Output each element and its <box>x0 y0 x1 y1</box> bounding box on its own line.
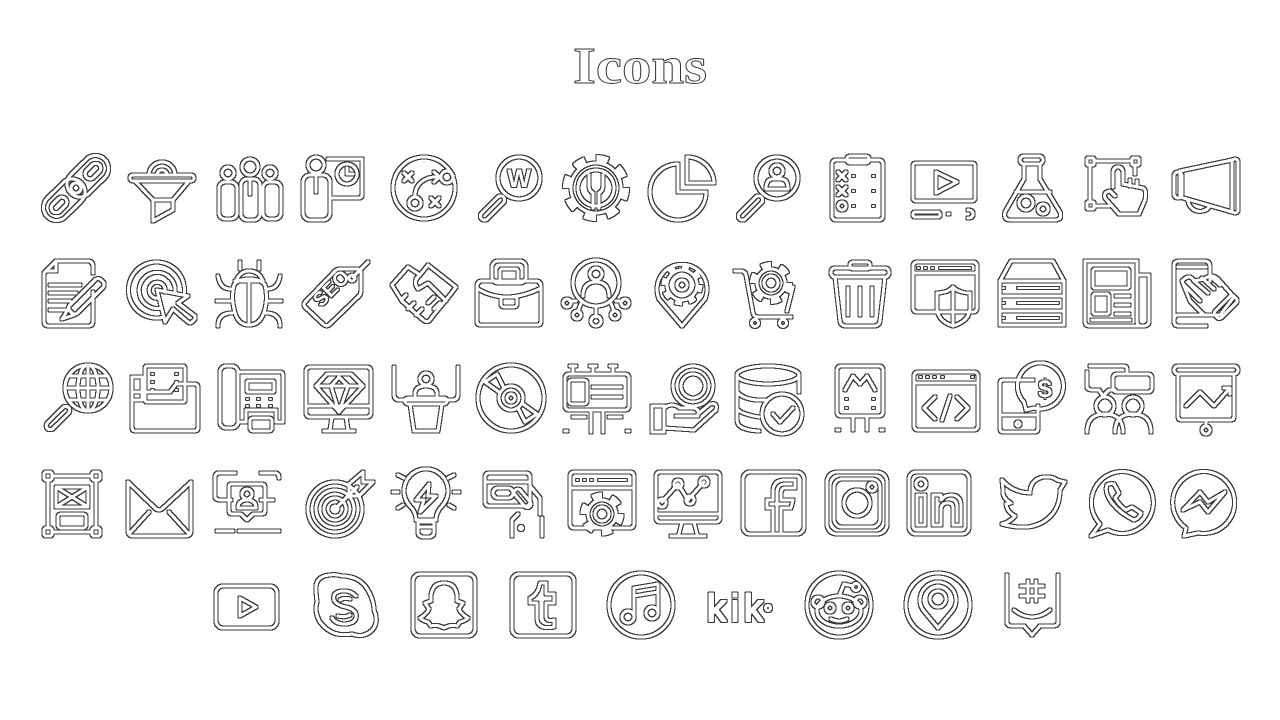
icon: gear with wrench <box>567 159 625 217</box>
icon: megaphone <box>1174 159 1238 213</box>
icon: card and hand <box>485 473 542 536</box>
icon: compact disc <box>478 365 544 431</box>
icon: cart with gear <box>735 265 793 326</box>
icon: hand on selection frame <box>1087 158 1146 214</box>
icon: WhatsApp <box>1091 472 1153 536</box>
icon: folder with film <box>132 366 198 431</box>
icon: Reddit <box>807 573 871 637</box>
icon: SEO price tag: SEO <box>309 266 354 312</box>
icon: team of people <box>219 159 281 220</box>
icon: video player <box>913 163 975 218</box>
icon: phone and pointing hand <box>1174 261 1238 326</box>
icon: globe search <box>45 365 111 431</box>
icon: Tumblr <box>512 574 574 636</box>
icon: mobile payment: $ <box>1038 375 1052 403</box>
icon: envelope <box>128 482 191 536</box>
icon: YouTube <box>216 586 277 628</box>
icon: presenter with chart <box>303 157 362 220</box>
icon: user notification <box>215 473 279 531</box>
icon: Skype <box>316 575 376 636</box>
icon: monitor with line chart <box>656 472 720 536</box>
icon: Facebook <box>743 472 804 534</box>
icon: crop frame <box>44 472 100 536</box>
icon: presentation chart <box>1174 366 1238 434</box>
icon: database with check <box>737 366 802 434</box>
icon: chain link <box>38 150 114 226</box>
icon: Instagram <box>827 472 887 534</box>
icon: magnifier with W <box>479 157 540 222</box>
icon: target with arrow <box>308 472 373 536</box>
icon: handshake <box>392 265 456 322</box>
icon: LinkedIn <box>909 472 969 534</box>
icon: target and cursor <box>128 262 195 323</box>
icon: user network <box>563 260 629 326</box>
icon: pie chart <box>650 157 714 220</box>
icon: browser and shield <box>913 262 977 326</box>
icon: magnifier with user <box>737 157 798 222</box>
icon: location pin with gear <box>657 264 707 326</box>
icon: billboard <box>565 366 629 432</box>
icon: map sign <box>837 366 883 430</box>
icon: people in discussion <box>1087 366 1152 432</box>
title: Icons <box>573 38 707 95</box>
icon: computer bug <box>217 262 281 326</box>
icon: checklist clipboard <box>832 156 883 220</box>
icon: newspaper <box>1085 261 1149 326</box>
icon: SEO price tag <box>304 262 368 326</box>
icon: speaker at podium <box>394 367 458 431</box>
icon: briefcase <box>477 261 541 325</box>
icon: Messenger <box>1173 472 1235 536</box>
icon: music note <box>609 573 673 637</box>
icon: GroupMe logo <box>1007 575 1058 635</box>
icon: desk telephone <box>220 366 283 431</box>
icon: Snapchat <box>413 574 475 636</box>
icon: code window <box>914 372 978 430</box>
icon: strategy map <box>393 157 455 219</box>
icon: document and pencil <box>44 261 106 326</box>
icon: Twitter bird <box>1002 477 1065 527</box>
icon: server rack <box>1000 261 1064 325</box>
icon: trash can <box>831 262 889 326</box>
icon: Kik logo: kik <box>707 588 764 630</box>
icon: laboratory flask <box>1005 156 1061 220</box>
icon: web settings <box>570 472 634 532</box>
icon: mobile payment <box>1000 363 1063 432</box>
icon grid <box>38 150 1238 637</box>
icon: magnifier with W: W <box>507 165 531 193</box>
icon: hand with coin <box>652 366 716 432</box>
icon: sales funnel <box>130 162 194 221</box>
icon: monitor with diamond <box>306 367 371 431</box>
icon: light bulb with bolt <box>393 469 459 537</box>
icon: location circle <box>906 573 970 637</box>
